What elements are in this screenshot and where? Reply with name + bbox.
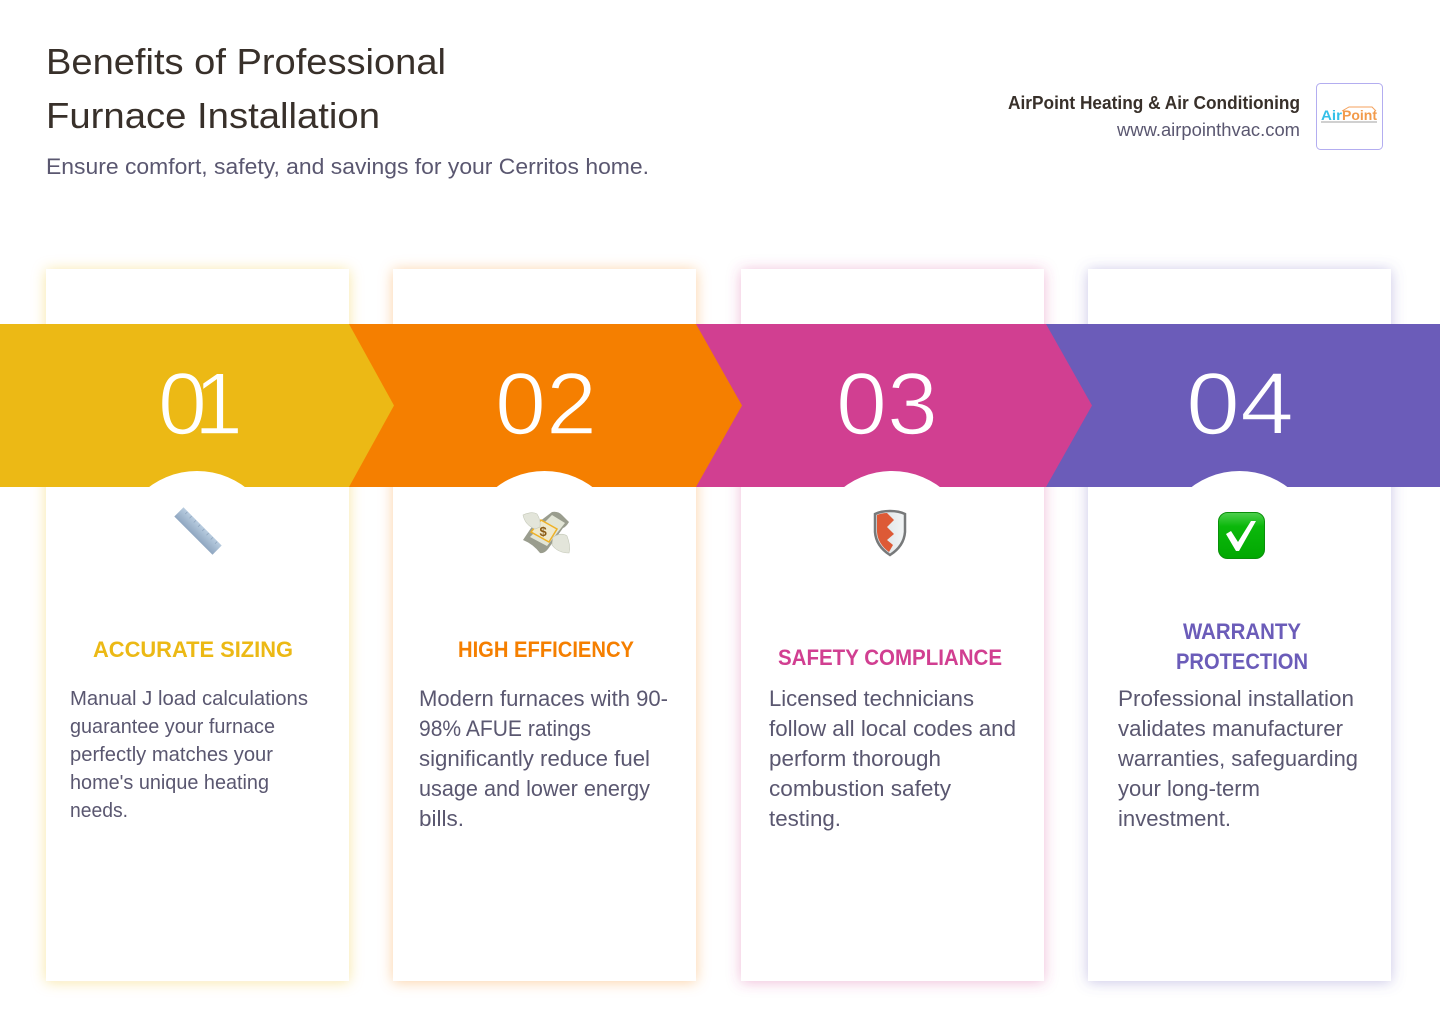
company name and website: AirPoint Heating & Air Conditioning xyxy=(1008,93,1300,113)
card 3 heading: SAFETY COMPLIANCE xyxy=(778,645,1002,670)
logo badge xyxy=(1316,84,1382,150)
card 2 body text: usage and lower energy xyxy=(419,776,650,801)
card 1 heading: ACCURATE SIZING xyxy=(93,637,293,662)
arrow 01: 1 xyxy=(194,354,243,453)
title: Benefits of Professional xyxy=(46,41,446,82)
card 4 heading: PROTECTION xyxy=(1176,649,1308,674)
icon badge 1: ruler xyxy=(117,471,277,631)
card 4 body text xyxy=(1117,686,1358,831)
card 1 body text: Manual J load calculations xyxy=(70,688,308,710)
card 2 body text: bills. xyxy=(419,806,464,831)
icon badge 2: money with wings xyxy=(464,471,624,631)
panel: card 1 background xyxy=(46,269,349,981)
title: Furnace Installation xyxy=(46,95,380,136)
card 2 body text: Modern furnaces with 90- xyxy=(419,686,668,711)
card 4 heading: WARRANTY xyxy=(1183,619,1301,644)
card 4 body text: validates manufacturer xyxy=(1118,716,1343,741)
card 4 body text: warranties, safeguarding xyxy=(1117,746,1358,771)
card 4 heading xyxy=(1176,619,1308,674)
panel: card 4 background xyxy=(1088,269,1391,981)
card 3 body text: combustion safety xyxy=(769,776,951,801)
card 2 body text: 98% AFUE ratings xyxy=(419,716,591,741)
arrow 04 xyxy=(1046,324,1440,487)
card 1 body text: home's unique heating xyxy=(70,772,269,794)
card 2 body text: significantly reduce fuel xyxy=(419,746,650,771)
card 2 body text xyxy=(419,686,668,831)
card 2 heading: HIGH EFFICIENCY xyxy=(458,637,634,662)
arrow 03 xyxy=(696,324,1092,487)
company name and website xyxy=(1008,93,1300,140)
subtitle: Ensure comfort, safety, and savings for your Cerritos home. xyxy=(46,154,649,179)
arrow 01 xyxy=(0,324,394,487)
card 4 body text: your long-term xyxy=(1118,776,1260,801)
card 1 body text xyxy=(70,688,308,822)
panel: card 2 background xyxy=(393,269,696,981)
arrow 03: 03 xyxy=(836,354,938,453)
card 4 body text: investment. xyxy=(1118,806,1231,831)
card 4 body text: Professional installation xyxy=(1118,686,1354,711)
arrow 04: 04 xyxy=(1186,354,1294,453)
title xyxy=(46,41,446,136)
arrow 02 xyxy=(349,324,742,487)
icon badge 2: money with wings: $ xyxy=(540,524,548,539)
card 1 body text: needs. xyxy=(70,800,128,822)
card 3 body text: follow all local codes and xyxy=(769,716,1016,741)
logo badge: Point xyxy=(1342,107,1377,123)
card 3 body text: perform thorough xyxy=(769,746,941,771)
company name and website: www.airpointhvac.com xyxy=(1116,120,1300,140)
card 3 body text: testing. xyxy=(769,806,841,831)
card 1 body text: perfectly matches your xyxy=(70,744,273,766)
icon badge 4: check mark xyxy=(1160,471,1320,631)
arrow 02: 02 xyxy=(495,354,597,453)
panel: card 3 background xyxy=(741,269,1044,981)
logo badge: Air xyxy=(1321,107,1343,123)
card 3 body text: Licensed technicians xyxy=(769,686,974,711)
icon badge 3: shield xyxy=(812,471,972,631)
card 3 body text xyxy=(769,686,1016,831)
arrow 01: 0 xyxy=(158,354,207,453)
card 1 body text: guarantee your furnace xyxy=(70,716,275,738)
